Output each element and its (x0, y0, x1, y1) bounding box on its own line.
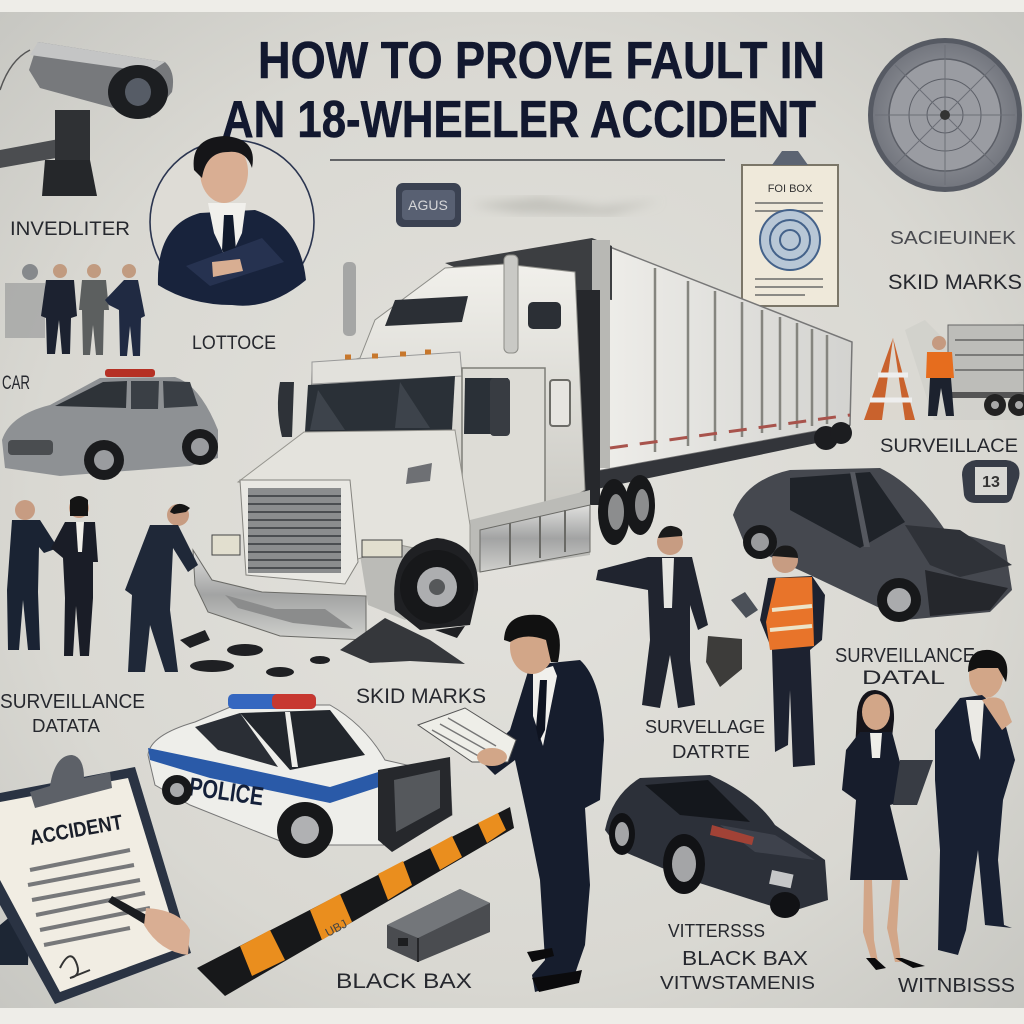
people: two people shaking hands (7, 496, 98, 656)
label: lottoce: LOTTOCE (192, 333, 276, 354)
labels: upper right: SACIEUINEK (890, 228, 1016, 248)
wheels (394, 475, 655, 630)
person: man bending to inspect (125, 504, 198, 672)
roadside scene: cone, worker, truck (864, 320, 1024, 420)
clipboard: report with fingerprint (742, 151, 838, 306)
badge (396, 183, 461, 227)
labels: witness statements: VITWSTAMENIS (660, 973, 815, 993)
icon: gauge dial (868, 38, 1022, 192)
car: gray SUV (2, 369, 218, 480)
car: police SUV: POLICE (187, 771, 266, 811)
label: surveillage date: SURVELLAGE (645, 717, 765, 737)
labels: witness statements: BLACK BAX (682, 948, 808, 970)
label: surveillance upper: SURVEILLACE (880, 436, 1018, 457)
car: crashed dark sedan (733, 468, 1012, 622)
person: main investigator reading report (418, 615, 604, 992)
label: black box: BLACK BAX (336, 970, 472, 993)
person: worker in orange vest with tablet (731, 545, 825, 767)
title: HOW TO PROVE FAULT IN (258, 32, 825, 90)
labels: upper right (888, 228, 1022, 294)
label: surveillance data right (835, 645, 975, 689)
labels: witness statements (660, 921, 815, 993)
hood and grille (212, 430, 470, 584)
left exhaust stack (343, 262, 356, 336)
title: AN 18-WHEELER ACCIDENT (222, 91, 816, 149)
truck: 18-wheeler (193, 238, 852, 640)
labels: witness statements: VITTERSSS (668, 921, 765, 941)
labels: upper right: SKID MARKS (888, 271, 1022, 294)
person: man thinking (935, 650, 1015, 955)
label: witness: WITNBISSS (898, 975, 1015, 997)
label: surveillance data left: DATATA (32, 716, 100, 736)
damaged bumper (193, 550, 366, 640)
icon: camera badge: 13 (982, 474, 1000, 491)
label: surveillance data left: SURVEILLANCE (0, 691, 145, 713)
label: surveillance data right: DATAL (862, 668, 945, 689)
barrier: striped black and orange (197, 807, 514, 996)
label: surveillage date (645, 717, 765, 762)
trailer (445, 238, 852, 490)
debris on ground (180, 618, 465, 677)
person: woman with tablet (842, 690, 933, 970)
icon: surveillance camera (0, 42, 173, 196)
portrait: lawyer in circle (150, 136, 314, 306)
label: surveillance data right: SURVEILLANCE (835, 645, 975, 667)
people: group at upper left (5, 264, 145, 356)
icon: black box (387, 889, 490, 962)
car: police SUV (148, 694, 452, 858)
label: investigator: INVEDLITER (10, 219, 130, 240)
label: car: CAR (2, 373, 30, 394)
clipboard: accident report: ACCIDENT (28, 811, 125, 850)
label: surveillance data left (0, 691, 145, 736)
clipboard: report with fingerprint: FOI BOX (768, 183, 813, 195)
barrier: striped black and orange: UBJ (323, 917, 349, 940)
icon: camera badge (962, 460, 1019, 503)
label: surveillage date: DATRTE (672, 742, 750, 762)
title (222, 32, 825, 149)
label: skid marks center: SKID MARKS (356, 685, 486, 708)
person: police officer pointing (596, 526, 742, 708)
cab body (278, 255, 585, 525)
car: dark rear sedan (605, 775, 828, 918)
badge: AGUS (408, 197, 448, 213)
clipboard: accident report (0, 755, 191, 1004)
fuel tank and chassis (360, 490, 590, 620)
